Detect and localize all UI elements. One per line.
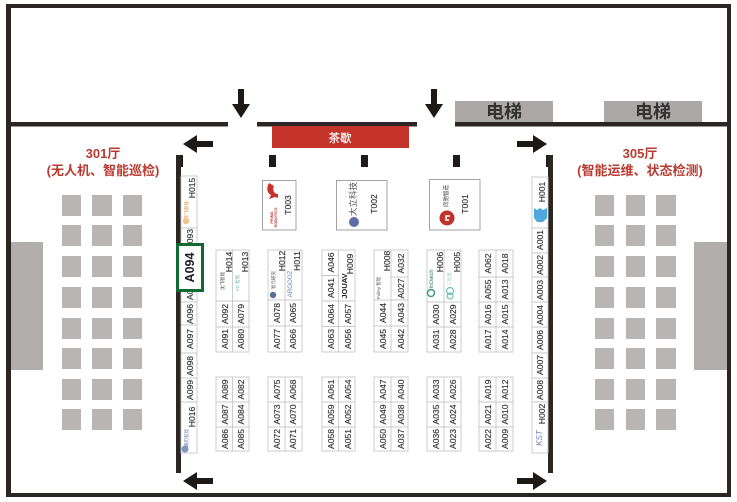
booth block 3 upper: A063	[326, 329, 336, 349]
booth block 3 upper: A064	[326, 304, 336, 324]
booth block 4 upper: A042	[396, 329, 406, 349]
arrow: top left	[183, 135, 213, 153]
booth block 6 lower: A010	[500, 404, 510, 425]
booth block 1 upper: A092	[220, 304, 230, 324]
booth block 1 lower: A085	[236, 429, 246, 449]
booth block 3 lower: A054	[343, 379, 353, 400]
booth block 2 upper: A077	[272, 329, 282, 349]
booth T002	[336, 180, 387, 230]
booth block 2 upper: 智元研究	[270, 271, 277, 289]
right wall booth column: A002	[535, 255, 545, 275]
booth block 5 lower: A035	[431, 404, 441, 425]
booth block 1 upper: AD 智能	[234, 274, 241, 291]
booth block 6 upper: A013	[500, 279, 510, 300]
hall 301 title: (无人机、智能巡检)	[47, 163, 159, 178]
booth T003: ROBOTICS	[274, 207, 278, 228]
booth block 5 upper: 三智慧	[446, 272, 453, 286]
booth block 1 lower: A082	[236, 379, 246, 400]
exhibition hall right wall	[548, 155, 553, 473]
booth block 2 upper: A065	[288, 303, 298, 323]
booth block 2 lower: A070	[288, 404, 298, 425]
booth block 5 upper: A030	[431, 304, 441, 325]
left wall booth column: A097	[185, 329, 195, 349]
highlighted booth A094: A094	[183, 253, 197, 282]
booth block 6 lower: A012	[500, 379, 510, 400]
booth block 2 lower: A073	[272, 404, 282, 425]
right wall booth column: A003	[535, 280, 545, 300]
tea break area	[272, 126, 409, 148]
hall 305 title	[577, 146, 703, 178]
booth block 5 lower: A023	[448, 429, 458, 449]
left wall booth column: A098	[185, 356, 195, 376]
booth block 4 upper: H008	[382, 251, 392, 271]
booth block 2 lower: A071	[288, 429, 298, 449]
booth block 6 upper: A018	[500, 253, 510, 274]
booth block 4 upper: A043	[396, 303, 406, 323]
right wall booth column: A006	[535, 330, 545, 350]
booth block 5 upper	[427, 250, 462, 352]
booth block 5 upper: A031	[431, 329, 441, 350]
booth block 5 upper: H005	[452, 252, 462, 272]
booth block 5 lower: A033	[431, 379, 441, 400]
booth block 3 lower: A059	[326, 404, 336, 425]
elevator right	[604, 101, 702, 122]
right wall booth column: A007	[535, 355, 545, 375]
booth block 1 upper	[216, 250, 250, 352]
booth block 3 upper: A046	[326, 252, 336, 273]
booth T002: T002	[369, 194, 379, 214]
left wall booth column: H015	[187, 178, 197, 198]
booth block 1 upper: A080	[236, 329, 246, 349]
booth block 4 lower: A049	[378, 404, 388, 425]
booth block 6 upper: A017	[483, 329, 493, 350]
booth block 3 lower: A061	[326, 379, 336, 400]
booth block 3 lower	[322, 377, 355, 451]
hall 305 stage	[694, 242, 727, 370]
tea break area: 茶歇	[328, 132, 352, 145]
right wall booth column	[532, 177, 548, 453]
booth block 6 lower: A022	[483, 429, 493, 449]
booth block 4 lower: A038	[396, 404, 406, 425]
right wall booth column: A001	[535, 230, 545, 250]
booth block 6 lower: A009	[500, 429, 510, 449]
booth block 2 upper	[268, 250, 302, 352]
booth block 4 lower: A037	[396, 429, 406, 449]
booth block 4 upper: A044	[378, 303, 388, 323]
booth block 5 lower: A036	[431, 429, 441, 449]
hall 305 title: 305厅	[623, 146, 657, 161]
booth block 6 upper: A015	[500, 304, 510, 325]
booth block 3 lower: A051	[343, 429, 353, 449]
right wall booth column: A004	[535, 305, 545, 325]
booth block 5 upper: A029	[448, 304, 458, 325]
booth block 5 lower	[427, 377, 461, 451]
arrow: top right	[517, 135, 547, 153]
left wall booth column: A096	[185, 304, 195, 324]
booth block 4 lower: A047	[378, 379, 388, 400]
booth block 4 lower: A040	[396, 379, 406, 400]
booth block 1 upper: A079	[236, 304, 246, 324]
booth block 2 lower: A075	[272, 379, 282, 400]
elevator left	[455, 101, 553, 122]
elevator left: 电梯	[486, 102, 522, 122]
booth block 5 upper: H006	[435, 252, 445, 272]
booth block 3 upper: A056	[343, 329, 353, 349]
booth block 3 lower: A052	[343, 404, 353, 425]
booth T003: T003	[283, 195, 293, 215]
booth block 6 lower: A019	[483, 379, 493, 400]
exhibition hall left wall	[176, 155, 181, 473]
booth block 2 lower: A068	[288, 379, 298, 400]
left wall booth column: A099	[185, 380, 195, 400]
right wall booth column: H002	[537, 404, 547, 424]
booth block 4 upper: A027	[396, 278, 406, 299]
arrow: right entrance down	[425, 89, 443, 118]
booth T003	[262, 180, 296, 230]
booth block 6 lower: A021	[483, 404, 493, 425]
booth block 3 upper	[322, 250, 355, 352]
booth block 2 upper: A078	[272, 303, 282, 323]
booth block 6 upper: A055	[483, 279, 493, 300]
booth block 6 upper: A016	[483, 304, 493, 325]
booth block 2 upper: A066	[288, 329, 298, 349]
hall 301 seating	[62, 195, 142, 430]
booth block 3 lower: A058	[326, 429, 336, 449]
booth block 1 lower: A086	[220, 429, 230, 449]
booth block 3 upper: A057	[343, 304, 353, 324]
booth T002: 大立科技	[348, 182, 358, 216]
booth block 4 upper: Pulley 智能	[375, 276, 382, 299]
booth block 2 upper: ARGOOZ	[287, 270, 294, 297]
hall 301 title	[47, 146, 159, 178]
booth block 6 lower	[479, 377, 513, 451]
left wall booth column: 朗历智能	[183, 429, 190, 447]
arrow: bottom left	[183, 472, 213, 490]
arrow: left entrance down	[232, 89, 250, 118]
booth block 2 lower	[268, 377, 302, 451]
booth block 1 lower: A089	[220, 379, 230, 400]
booth block 6 upper: A014	[500, 329, 510, 350]
left wall booth column	[181, 176, 197, 453]
hall 305 title: (智能运维、状态检测)	[577, 163, 703, 178]
booth block 1 lower: A084	[236, 404, 246, 425]
left wall booth column: A093	[185, 229, 195, 249]
booth block 4 lower: A050	[378, 429, 388, 449]
right wall booth column: KST	[535, 429, 544, 446]
booth block 5 lower: A024	[448, 404, 458, 425]
booth block 3 upper: JOUAV	[340, 273, 349, 299]
booth block 6 upper	[479, 250, 513, 352]
booth block 1 upper: H013	[240, 252, 250, 272]
booth block 1 lower: A087	[220, 404, 230, 425]
pillars	[176, 155, 553, 167]
hall 305 seating	[595, 195, 676, 430]
booth block 5 lower: A026	[448, 379, 458, 400]
booth block 4 lower	[374, 377, 408, 451]
booth block 2 upper: H012	[277, 251, 287, 271]
booth block 6 upper: A062	[483, 253, 493, 274]
booth block 1 upper: A091	[220, 329, 230, 349]
booth T001: 同驰智造	[442, 185, 450, 207]
left wall booth column: 华飞智能	[183, 201, 190, 219]
booth T001: T001	[460, 194, 470, 214]
booth block 2 upper: H011	[292, 251, 302, 271]
booth block 3 upper: A041	[326, 278, 336, 298]
arrow: bottom right	[517, 472, 547, 490]
booth block 1 upper: H014	[224, 252, 234, 272]
left wall booth column: H016	[187, 407, 197, 427]
right wall booth column: H001	[537, 182, 547, 202]
booth block 5 upper: A028	[448, 329, 458, 350]
booth T001	[430, 180, 480, 230]
booth block 1 lower	[216, 377, 249, 451]
left wall booth column: A095	[185, 280, 195, 300]
booth block 2 lower: A072	[272, 429, 282, 449]
booth block 4 upper	[374, 250, 408, 352]
elevator right: 电梯	[635, 102, 671, 122]
hall 301 stage	[11, 242, 43, 370]
booth block 4 upper: A032	[396, 253, 406, 274]
booth T003: PRIMA	[270, 211, 274, 224]
right wall booth column: A008	[535, 380, 545, 400]
highlighted booth A094	[178, 244, 202, 290]
booth block 1 upper: 沈飞智能	[219, 272, 226, 290]
booth block 4 upper: A045	[378, 329, 388, 349]
booth block 5 upper: InDatch	[429, 270, 435, 288]
hall 301 title: 301厅	[86, 146, 120, 161]
booth block 3 upper: H009	[345, 254, 355, 274]
